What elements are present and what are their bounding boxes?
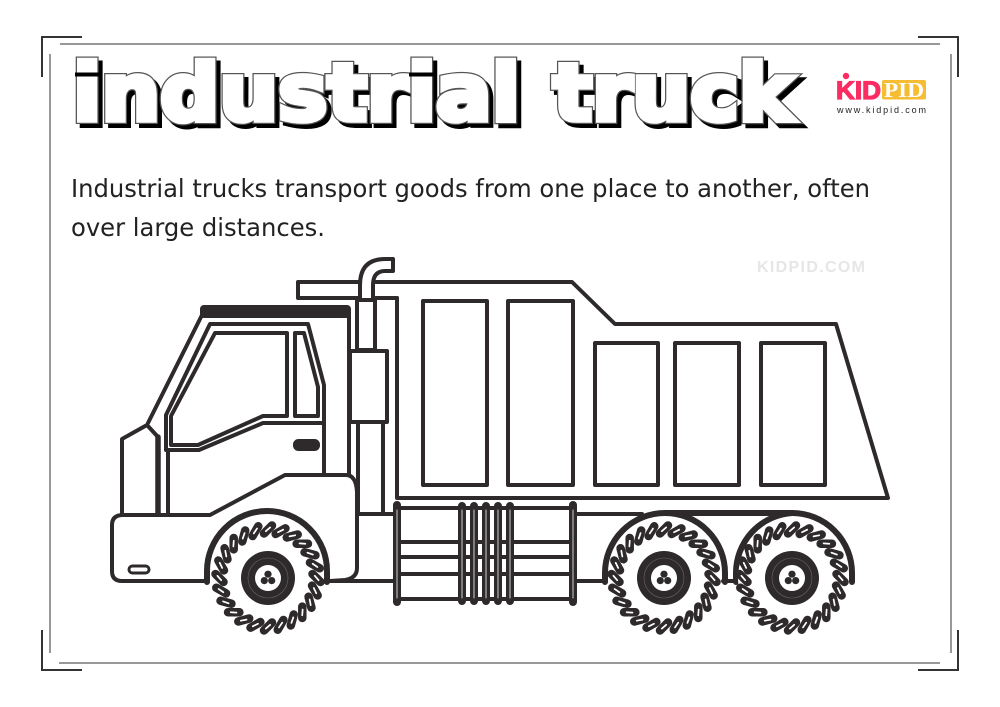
cab <box>122 307 349 514</box>
title: truck <box>557 53 799 143</box>
truck illustration <box>112 259 888 632</box>
logo: Kidpid: KID <box>836 77 881 105</box>
logo: Kidpid: www.kidpid.com <box>836 105 926 115</box>
title: truck <box>553 49 795 139</box>
title: industrial <box>77 53 524 143</box>
title: truck <box>553 49 795 139</box>
rear wheel one <box>610 524 718 632</box>
dump body <box>298 282 888 498</box>
rear wheel two <box>738 524 846 632</box>
front wheel <box>214 524 322 632</box>
logo: Kidpid <box>836 73 926 115</box>
side tank <box>397 505 573 602</box>
chassis lines <box>330 514 733 581</box>
title <box>73 49 799 143</box>
title: industrial <box>73 49 520 139</box>
description text: over large distances. <box>71 213 325 242</box>
watermark: KIDPID.COM <box>757 259 865 276</box>
description text: Industrial trucks transport goods from one place to another, often <box>71 174 870 203</box>
wheel fenders <box>207 511 852 582</box>
description text <box>71 174 870 242</box>
title: industrial <box>73 49 520 139</box>
front bumper and fender <box>112 475 357 581</box>
logo: Kidpid: PID <box>884 78 924 102</box>
exhaust pipe and muffler <box>350 259 393 514</box>
